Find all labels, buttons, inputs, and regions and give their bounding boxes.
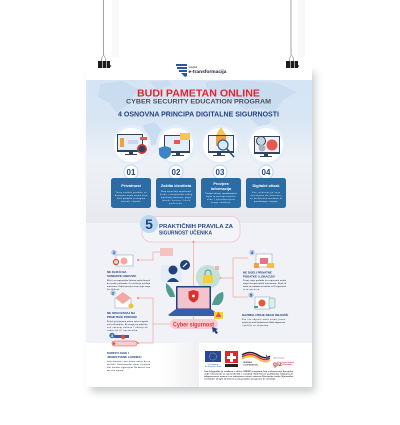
text: NE DIJELI PRIVATNE [243,270,272,274]
binder clip right [286,0,300,68]
logo text: Väsjäat [188,65,197,69]
speech bubble card [160,248,173,256]
card: dostupna samo onima koje [115,194,148,197]
poster shadow [91,72,315,392]
card: Sve informacije koje [252,192,281,194]
card: kojim se pristupa tekstovi, [206,195,236,198]
text: do krađe podataka ili infekcije uređaja [107,282,151,285]
text: samo sa osobama od zaštite te 12 sigurnosti [243,285,286,288]
section heading: 4 OSNOVNA PRINCIPA DIGITALNE SIGURNOSTI [118,112,279,118]
text: KORISTI JAKE I [107,351,129,355]
icon: suspicious link: 1 [113,250,116,255]
German cooperation logo [242,352,270,366]
text: JEDINSTVENE LOZINKE! [107,355,142,359]
icon: digital footprint monitor [246,125,286,165]
panel: principle 3 [200,125,241,208]
icon: identity shield monitor [156,125,196,165]
card: Zaštita identiteta [161,184,192,188]
card: Digitalni otisak [252,184,280,188]
text: zaštitiš. Kombinacija slova i brojeva [107,363,151,366]
text: već sačuvaj dokaze i obavijesti [107,326,148,329]
card [156,178,196,208]
warning sign [214,312,223,319]
binder clip left [98,0,112,68]
card: na društvenim mrežama ili [250,197,283,200]
panel: principle 2 [156,125,196,208]
GIZ logo: giz [273,361,283,368]
icon: key badge [180,260,190,270]
subtitle: CYBER SECURITY EDUCATION PROGRAM [126,100,271,106]
card: podataka. [169,202,183,205]
text: što klikneš. [107,288,120,291]
panel: principle 4 [246,125,286,208]
disclaimer text: unija i Švicarska te sprovodi GIZ u saradnji. Sadržaj ove publikacije isključiva je [204,372,294,376]
card [246,178,286,208]
logo mark [176,64,187,77]
text: i pažljiv sa objavama. [242,324,269,327]
card: ostavljamo na internetu, [250,194,282,197]
icon: hacker [161,265,182,282]
EU logo: the European Union [205,365,221,368]
plant leaves [166,283,224,305]
text: nisi prihvatljivo. Ne reaguj na prijetnje, [107,323,148,326]
card: svoga sadržaja. [211,202,231,204]
GIZ logo: Deutsche Gesellschaft [282,361,295,364]
logo [176,64,227,77]
card: želiš podijeliti sa drugima [117,197,146,200]
disclaimer text: Ova infografika je izrađena u okviru UNDEP programa, koji sufinansiraju Evropska [204,370,294,373]
disclaimer text [204,370,294,380]
text: Sve što objaviš može ostati javno [242,318,286,321]
illustration: laptop and security [160,248,224,334]
icon: shopping window: 4 [251,250,254,255]
text [107,269,151,291]
rule 2 [107,290,149,332]
card: Provjera [213,182,229,186]
number 02: 02 [172,168,181,177]
connector lines [137,241,248,344]
wall shadow strips [112,0,305,58]
text: PODATKE I LOKACIJU! [243,274,275,278]
text: SUMNJIVE LINKOVE! [107,274,136,278]
German cooperation logo: COOPERATION [243,364,258,366]
text: uvijek na mreži budućnosti. Budi odgovoran [242,321,286,324]
heading: five rules [140,215,240,242]
card: lozinki, kartica i ličnih [162,199,190,202]
card: informacija [211,187,232,191]
panel: principle 1 [111,125,151,208]
card: slike i vjerodostojnost [207,198,235,201]
grey band [86,160,312,223]
text: PRIJETEĆE PORUKE! [107,314,137,319]
rule 5 [242,292,288,327]
number 01: 01 [127,168,136,177]
text [107,311,149,332]
text [243,270,287,291]
card: pretraživanja - trajanje. [254,200,278,203]
GIZ logo: für Zusammenarbeit [282,363,293,366]
lower background [86,223,312,343]
text: čini lozinku sigurnijom. Ne koristi istu [107,366,151,369]
heading: five rules: 5 [145,216,153,232]
text: na više mjesta. [107,369,124,372]
rule 4 [243,250,287,291]
cyber security label: Cyber sigurnost [173,322,215,328]
card: digitalnog identiteta, poput [161,196,191,199]
text: malverom. Uvijek provjeri izvor prije nego [107,286,151,288]
icon: information check monitor [200,125,240,165]
title: BUDI PAMETAN ONLINE [137,88,260,100]
text [107,351,151,372]
logo: e-transformacija [188,69,227,74]
cursor arrow [212,327,218,334]
rule 3 [107,333,151,372]
card: krađu i zloupotrebu vašeg [160,193,192,196]
text: Kliki i sa nepoznatim linkova može dovesti [107,279,150,282]
GIZ logo [273,356,295,368]
number 04: 04 [262,168,271,177]
EU logo [205,351,221,368]
icon: profile and phone: 5 [250,292,253,298]
card: Tvoje osobne podatke su [116,191,146,194]
text: NE ODGOVARAJ NA [107,311,136,315]
number 03: 03 [216,168,225,177]
card [111,178,151,208]
GIZ logo: Implemented by [273,356,285,360]
partner logos [205,351,295,368]
card: Skup mjera koje sprječavaju [161,191,191,193]
heading: five rules: PRAKTIČNIH PRAVILA ZA [159,223,233,230]
card: koristiti i dijeliti. [121,200,141,203]
disclaimer text: odgovornost autora i ne odražava nužno stavove Evropske unije. Njemačka [204,375,294,378]
icon: padlock [196,265,220,289]
icon: privacy monitor [111,125,151,165]
card: Privatnost [121,183,141,188]
text [242,312,288,327]
Swiss flag [225,351,238,367]
text: Izvještavanje kao dobar način da se [107,360,150,363]
disclaimer text: saradnja i drugih donatora ovog projekta programa ili saradnje. [204,378,277,380]
text: Čuvaj svoje podatke jer nepoznate osobe [243,279,286,282]
heading: five rules: SIGURNOST UČENIKA [159,230,212,236]
laptop [168,286,219,316]
EU logo: Co-funded by [208,364,218,366]
text: Prijeti prijetnjama putem cyber napada [107,320,149,323]
header map band [86,80,312,160]
text: informacija. [243,289,260,291]
text: mogu zloupotrijebiti informacije. Dijeli ih [243,282,287,285]
text: RAZMISLI PRIJE NEGO OBJAVIŠ! [242,312,288,317]
German cooperation logo: GERMAN [243,361,252,364]
rule 1 [107,250,151,291]
hanging poster [86,59,312,387]
fold shading [160,343,199,387]
text: NE KLIKĆI NA [107,269,127,274]
card: Provjeri točnost, vjerodostojnost [206,192,237,195]
poster sheet [86,59,312,387]
icon: password field: 3 [111,333,114,338]
icon: phishing envelope: 2 [112,290,115,296]
text: roditelje ili nastavnika. [107,329,138,332]
card [201,178,241,208]
